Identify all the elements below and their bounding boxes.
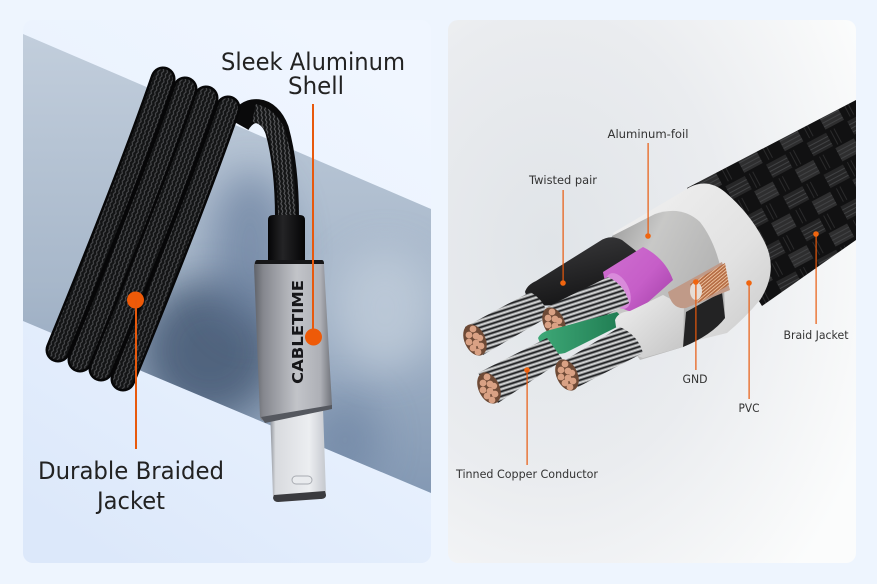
braid jacket [687,100,856,306]
aluminum foil layer [600,211,725,360]
green tube [538,312,627,354]
panel background [23,20,431,563]
label: twisted pair: Twisted pair [528,173,597,187]
magenta tube [600,247,673,313]
label: braid jacket: Braid Jacket [784,328,849,342]
PVC outer sleeve [613,183,771,347]
label: aluminum-foil: Aluminum-foil [608,127,688,141]
label: PVC [738,280,760,415]
panel: exterior view [23,20,435,563]
label: PVC: PVC [738,401,760,415]
black twisted-pair tube [525,237,650,305]
label: twisted pair [528,173,597,286]
panel: cable cross-section [448,20,856,563]
label: tinned copper conductor: Tinned Copper Conductor [455,467,598,481]
callout: durable braided jacket: Jacket [95,487,165,515]
callout: durable braided jacket: Durable Braided [38,457,224,485]
USB-B plug metal [270,408,326,502]
black strain-relief boot [268,215,305,262]
label: braid jacket [784,231,849,342]
label: aluminum-foil [608,127,688,239]
label: tinned copper conductor [455,367,598,481]
label: GND: GND [682,372,708,386]
callout: sleek aluminum shell: Shell [288,72,344,100]
strand: green wire [473,338,563,407]
label: GND [682,279,708,386]
strand: white wire [551,327,643,394]
callout: durable braided jacket [38,292,224,515]
aluminum shell [254,260,332,423]
white tube [615,295,684,358]
GND copper conductor [668,262,730,308]
panel background [448,20,856,563]
callout: sleek aluminum shell [221,48,405,346]
coiled braided cable [58,79,228,379]
strand: black wire [459,292,548,359]
cable neck [238,111,287,218]
strand: magenta wire [538,277,629,342]
logo: CABLETIME [289,280,307,384]
diagonal blue band [23,34,435,493]
callout: sleek aluminum shell: Sleek Aluminum [221,48,405,76]
